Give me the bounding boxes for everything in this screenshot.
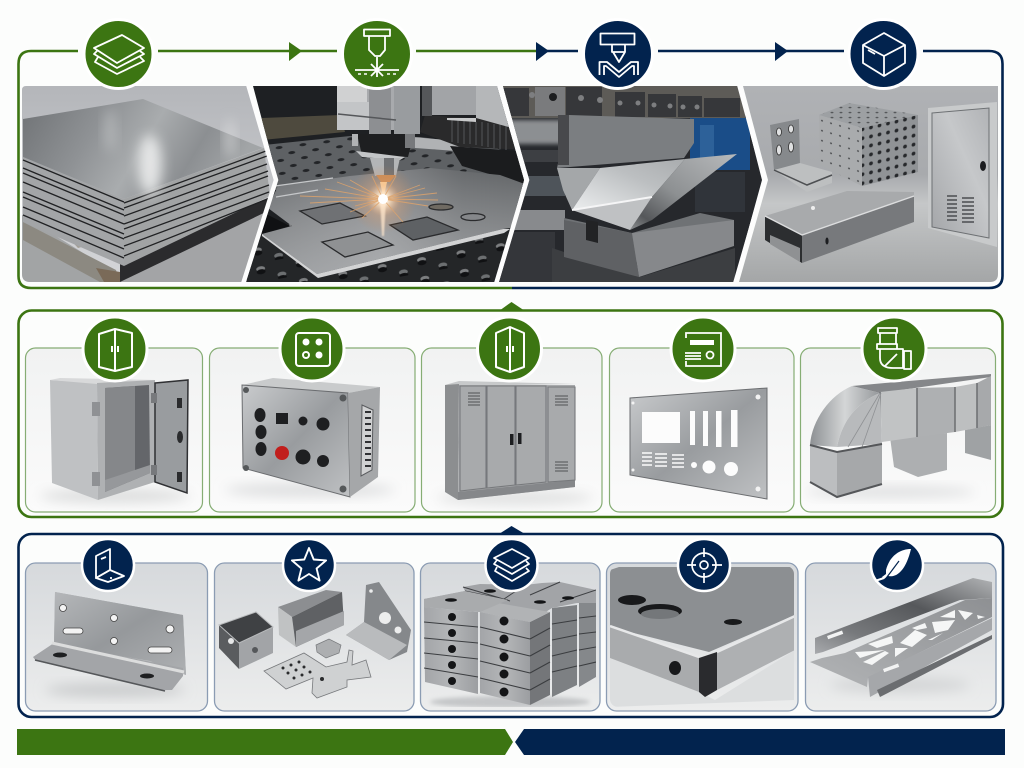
icon: laser head [342, 20, 412, 88]
icon: bracket [82, 539, 134, 591]
photo: press brake bending [495, 86, 765, 282]
card: control box [210, 348, 415, 512]
separators: chevron dividers [243, 84, 765, 284]
part: tube box [278, 590, 344, 647]
arrow: navy two [775, 42, 788, 61]
part: triangular gusset [346, 582, 411, 660]
icon: target [678, 539, 730, 591]
card: assorted parts [214, 563, 414, 711]
icon: box [849, 20, 918, 88]
arrow: navy one [536, 42, 549, 61]
icon: cabinet [478, 317, 542, 381]
frame: navy panel [18, 534, 1003, 717]
icon: door cabinet [83, 317, 147, 381]
flow line navy section [512, 51, 1002, 288]
part: rectangular channel [765, 191, 914, 263]
icon: duct elbow [862, 317, 926, 381]
icon: star [283, 539, 335, 591]
card: lattice tray [806, 563, 996, 711]
icon: press brake [584, 20, 652, 88]
part: perforated flat plate [264, 650, 371, 698]
card: ductwork [800, 348, 996, 512]
icon: material layers [84, 20, 153, 88]
panel: process flow [18, 20, 1002, 288]
card: floor cabinet [422, 348, 602, 512]
arrow: green [289, 42, 302, 61]
part: L bracket [770, 119, 832, 192]
icon: control panel [280, 317, 344, 381]
flow line green section [18, 51, 536, 288]
icon: stack layers [486, 539, 538, 591]
frame: green panel [18, 310, 1002, 517]
card: bracket [26, 563, 208, 711]
panel: product examples [18, 302, 1002, 517]
progress bar: green [17, 729, 513, 755]
icon: feather [871, 539, 923, 591]
card: stacked housings [420, 563, 600, 711]
progress bar: navy [515, 729, 1005, 755]
photo: laser cutting [245, 86, 530, 286]
notch arrow [499, 302, 525, 311]
panel: parts gallery [18, 526, 1003, 717]
part: door panel [928, 102, 997, 247]
card: cut panel [610, 348, 794, 512]
icon: cut plate [671, 317, 735, 381]
notch arrow [499, 526, 525, 534]
card: corner closeup [606, 563, 798, 711]
part: open box [219, 612, 273, 669]
photo: finished fabricated parts [735, 86, 1000, 282]
part: small block [316, 639, 341, 658]
part: perforated cube [819, 103, 918, 186]
photo: stacked metal sheets [22, 86, 282, 282]
card: enclosure [26, 348, 202, 512]
